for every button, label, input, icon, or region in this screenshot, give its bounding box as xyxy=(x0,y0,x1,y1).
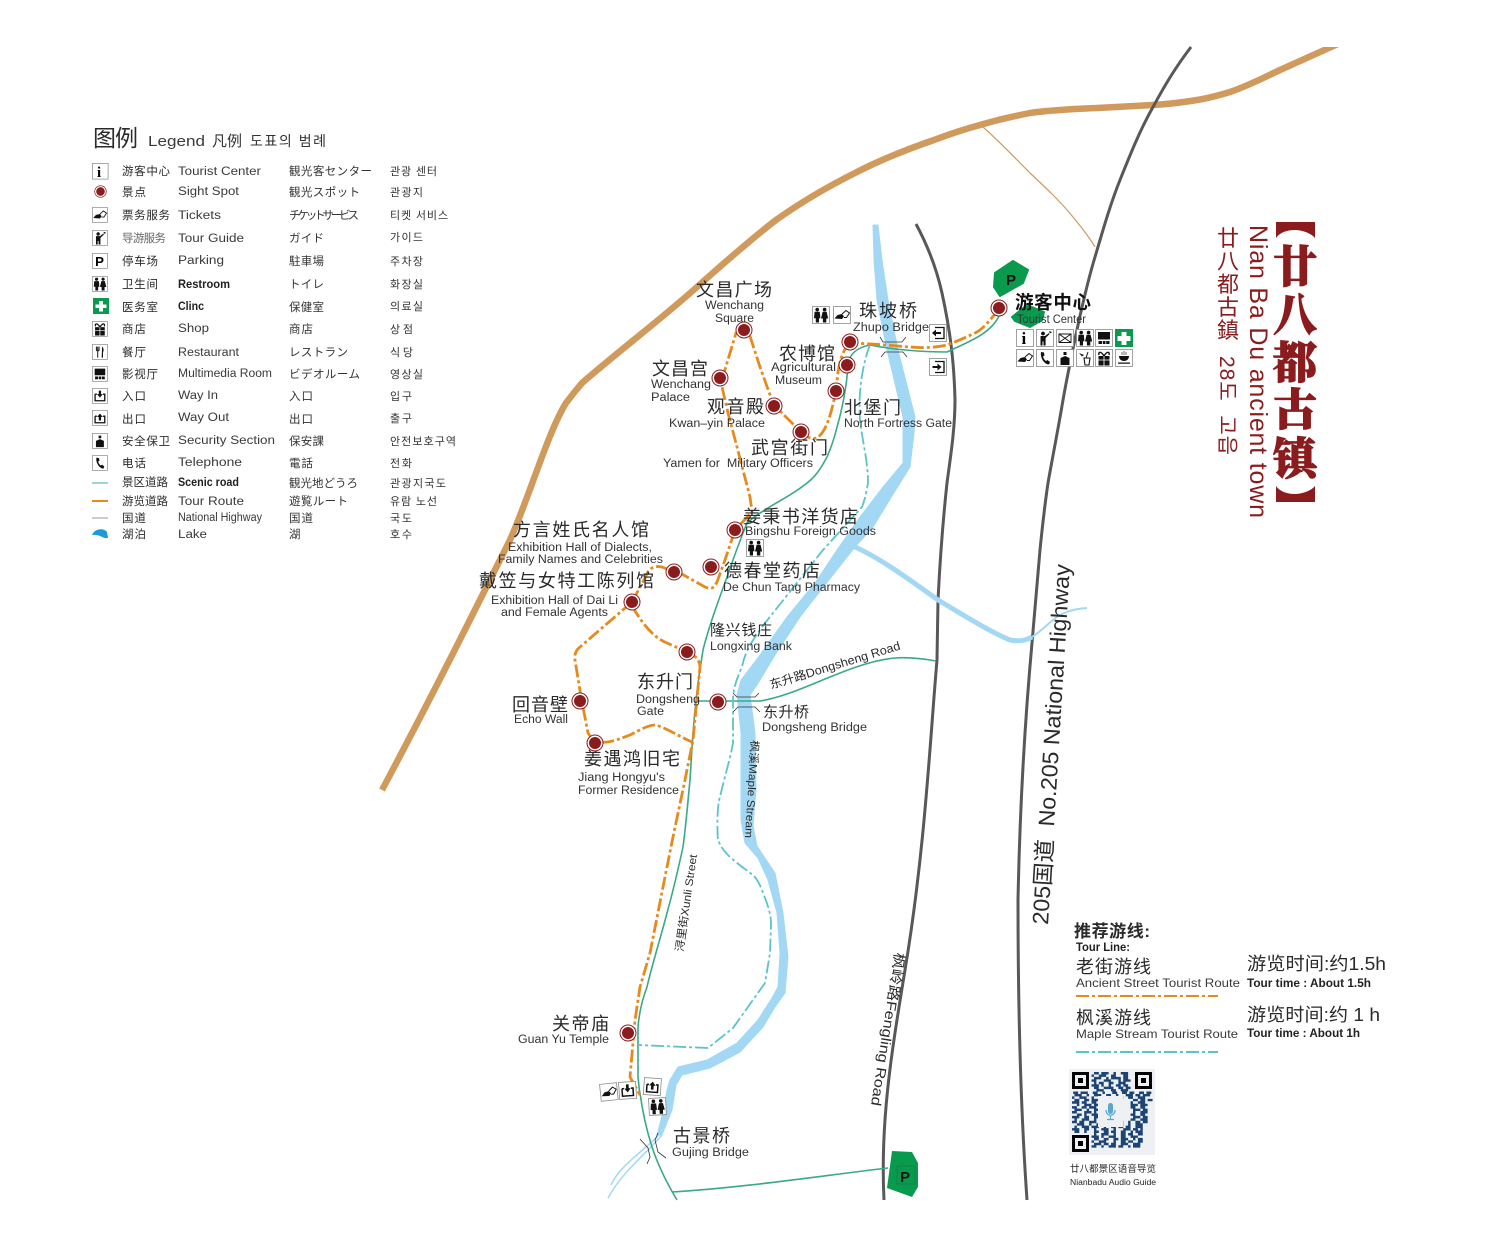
traditional title: 廿 xyxy=(1217,226,1239,251)
label: dongsheng bridge: Dongsheng Bridge xyxy=(762,722,867,734)
english title: Nian Ba Du ancient town xyxy=(1244,225,1272,518)
legend row: security section: Security Section xyxy=(178,435,275,447)
label: exhibition hall of dialects: 方言姓氏名人馆 xyxy=(513,520,649,540)
legend row: tickets: 票务服务 xyxy=(122,208,170,222)
ancient street route: Ancient Street Tourist Route xyxy=(1076,976,1240,990)
korean title: 28도 고읍 xyxy=(1215,356,1238,455)
tour time 1.5h xyxy=(1247,954,1386,990)
label: longxing bank: Longxing Bank xyxy=(710,641,792,653)
label: wenchang square xyxy=(696,280,772,325)
label: de chun tang pharmacy: De Chun Tang Pharmacy xyxy=(723,582,860,594)
label: longxing bank xyxy=(710,621,792,653)
legend row: lake xyxy=(92,527,412,541)
legend row: shop: Shop xyxy=(178,323,209,335)
road label: dongsheng road: 东升路Dongsheng Road xyxy=(767,638,902,692)
legend row: security section: 安全保卫 xyxy=(122,434,170,448)
fengling link road xyxy=(672,1168,888,1192)
legend row: security section xyxy=(92,433,456,448)
label: wenchang palace xyxy=(651,359,711,404)
legend title xyxy=(93,125,326,151)
legend row: national highway: 국도 xyxy=(390,513,412,525)
legend row: multimedia room: 영상실 xyxy=(390,368,423,381)
legend row: scenic road: Scenic road xyxy=(178,477,239,489)
label: gujing bridge xyxy=(672,1126,749,1159)
legend row: parking: P xyxy=(95,254,104,269)
legend row: telephone: 电话 xyxy=(122,457,146,470)
legend row: restaurant: Restaurant xyxy=(178,347,240,359)
legend row: lake: Lake xyxy=(178,529,207,541)
legend row: national highway: 国道 xyxy=(122,511,146,525)
title characters: 廿 xyxy=(1273,231,1317,295)
tour line heading: Tour Line: xyxy=(1076,940,1130,954)
label: dongsheng gate: Gate xyxy=(637,706,664,718)
legend row: clinic: Clinc xyxy=(178,301,205,313)
parking: south: P xyxy=(900,1169,910,1186)
legend row: tour route: 游览道路 xyxy=(122,494,168,508)
tour time 1h xyxy=(1247,1005,1380,1040)
label: exhibition hall of dialects xyxy=(498,520,663,566)
legend row: restaurant: レストラン xyxy=(289,347,348,359)
label: zhupo bridge: 珠坡桥 xyxy=(859,301,917,321)
label: dai li exhibition hall: Exhibition Hall of Dai Li xyxy=(491,595,618,607)
label: jiang hongyu former residence: 姜遇鸿旧宅 xyxy=(584,749,680,769)
legend row: telephone: Telephone xyxy=(178,457,242,469)
label: agricultural museum xyxy=(771,344,836,387)
legend row: tourist center: 游客中心 xyxy=(122,164,170,178)
dongsheng road xyxy=(696,658,936,701)
ancient street route (orange dashed) xyxy=(575,309,999,1095)
road label: xunli street: 浔里街Xunli Street xyxy=(672,853,700,952)
legend row: tour guide: Tour Guide xyxy=(178,233,244,245)
label: dai li exhibition hall: and Female Agents xyxy=(501,607,608,619)
traditional title: 古 xyxy=(1217,295,1239,320)
label: wenchang palace: Palace xyxy=(651,392,690,404)
icon: exit xyxy=(930,324,946,342)
label: guan yu temple xyxy=(518,1014,609,1046)
legend row: sight spot xyxy=(95,185,423,199)
label: echo wall xyxy=(512,695,568,726)
facility icons: tourist center: i xyxy=(1022,329,1026,348)
legend row: tour guide xyxy=(92,230,423,245)
title: Nianbadu ancient town xyxy=(1215,222,1324,518)
legend row: tourist center xyxy=(92,163,437,181)
legend row: tour guide: 가이드 xyxy=(390,231,423,244)
label: dongsheng gate xyxy=(636,672,700,718)
legend row: parking xyxy=(92,253,423,269)
tour time 1h: 游览时间:约 1 h xyxy=(1247,1005,1380,1025)
river tail xyxy=(608,1134,662,1198)
label: dai li exhibition hall: 戴笠与女特工陈列馆 xyxy=(479,571,654,591)
legend row: way out: 出口 xyxy=(122,412,146,426)
road label: maple stream: 枫溪Maple Stream xyxy=(742,740,762,838)
traditional title xyxy=(1217,226,1239,343)
legend row: national highway: National Highway xyxy=(178,512,262,524)
legend row: way out: 出口 xyxy=(289,412,313,426)
scenic road (green) xyxy=(638,316,999,1200)
legend row: sight spot: 景点 xyxy=(122,186,146,199)
qr microphone icon xyxy=(1098,1096,1123,1127)
legend row: restaurant xyxy=(92,344,413,359)
qr finder patterns xyxy=(1074,1074,1150,1150)
title brackets xyxy=(1276,222,1315,502)
legend row: clinic: 保健室 xyxy=(289,300,324,314)
legend row: restroom: 화장실 xyxy=(390,278,423,291)
legend row: shop: 商店 xyxy=(289,322,313,336)
label: kwan-yin palace xyxy=(669,397,765,430)
legend row: restroom: 卫生间 xyxy=(122,277,158,291)
bridge marks xyxy=(640,337,907,1164)
legend row: scenic road: 観光地どうろ xyxy=(289,476,358,490)
legend row: tour route: Tour Route xyxy=(178,496,244,508)
legend row: tickets: チケットサービス xyxy=(289,209,359,222)
legend row: way out: 출구 xyxy=(390,412,412,425)
label: exhibition hall of dialects: Family Names and Celebrities xyxy=(498,554,663,566)
parking: south xyxy=(887,1151,918,1197)
icon: restroom at bingshu xyxy=(746,540,764,556)
legend row: way in: 入口 xyxy=(289,390,313,403)
legend row: shop xyxy=(92,321,413,336)
label: gujing bridge: Gujing Bridge xyxy=(672,1147,749,1159)
legend table xyxy=(92,163,456,541)
legend row: clinic: 医务室 xyxy=(122,300,158,314)
legend row: scenic road xyxy=(92,475,446,490)
label: wenchang palace: 文昌宫 xyxy=(652,359,708,379)
icons: zhupo bridge restroom and tickets xyxy=(812,306,850,324)
legend row: multimedia room: Multimedia Room xyxy=(178,368,272,380)
tour time 1.5h: Tour time : About 1.5h xyxy=(1247,976,1371,990)
legend row: shop: 商店 xyxy=(122,322,146,336)
spot labels xyxy=(479,280,952,1159)
label: bingshu foreign goods: 姜秉书洋货店 xyxy=(743,507,858,527)
label: yamen for military officers: 武宫街门 xyxy=(751,438,828,458)
legend row: way in: 入口 xyxy=(122,390,146,403)
label: jiang hongyu former residence: Former Residence xyxy=(578,785,679,797)
label: north fortress gate: North Fortress Gate xyxy=(844,418,952,430)
road label: national highway 205: 205国道 No.205 National Highway xyxy=(1028,563,1075,925)
label: echo wall: 回音壁 xyxy=(512,695,568,715)
legend row: scenic road: 관광지국도 xyxy=(390,477,446,490)
label: zhupo bridge: Zhupo Bridge xyxy=(853,322,929,334)
legend row: restroom: トイレ xyxy=(289,279,324,291)
label: longxing bank: 隆兴钱庄 xyxy=(710,621,772,639)
provincial road (tan) xyxy=(382,43,1340,790)
legend row: tour route xyxy=(92,494,437,508)
legend row: tour route: 遊覧ルート xyxy=(289,494,348,508)
legend row: multimedia room: ビデオルーム xyxy=(289,367,360,381)
label: tourist center xyxy=(1015,292,1091,326)
legend row: tourist center: Tourist Center xyxy=(178,166,261,178)
legend row: way in xyxy=(92,388,412,403)
legend row: way in: Way In xyxy=(178,390,218,402)
road labels xyxy=(672,563,1075,1107)
title characters: 都 xyxy=(1273,327,1317,391)
parking: north: P xyxy=(1006,272,1016,289)
label: dongsheng gate: 东升门 xyxy=(637,672,693,692)
legend row: tour guide: ガイド xyxy=(289,232,324,245)
legend row: restaurant: 식당 xyxy=(390,346,413,359)
qr caption: 廿八都景区语音导览 xyxy=(1070,1163,1156,1175)
legend row: tourist center: i xyxy=(97,165,101,181)
label: jiang hongyu former residence: Jiang Hongyu's xyxy=(578,772,665,784)
legend row: sight spot: 観光スポット xyxy=(289,185,360,199)
legend row: restroom xyxy=(92,276,423,291)
title characters: 古 xyxy=(1273,374,1317,438)
label: yamen for military officers: Yamen for Military Officers xyxy=(663,458,813,470)
ancient street route: 老街游线 xyxy=(1076,957,1151,977)
legend row: parking: 停车场 xyxy=(122,254,158,268)
legend row: restroom: Restroom xyxy=(178,279,230,291)
traditional title: 都 xyxy=(1217,272,1239,297)
legend row: way out: Way Out xyxy=(178,412,230,424)
maple stream route xyxy=(1076,1008,1238,1052)
label: dai li exhibition hall xyxy=(479,571,654,619)
tour time 1h: Tour time : About 1h xyxy=(1247,1026,1360,1040)
legend row: tourist center: 観光客センター xyxy=(289,164,372,178)
legend row: telephone: 電話 xyxy=(289,456,314,470)
legend row: multimedia room xyxy=(92,366,423,381)
legend title: Legend xyxy=(148,133,205,150)
label: bingshu foreign goods: Bingshu Foreign Goods xyxy=(745,526,876,538)
legend row: tour guide: 导游服务 xyxy=(122,231,166,245)
legend row: multimedia room: 影视厅 xyxy=(122,367,158,381)
label: guan yu temple: 关帝庙 xyxy=(552,1014,609,1034)
label: kwan-yin palace: Kwan–yin Palace xyxy=(669,418,765,430)
legend row: shop: 상점 xyxy=(390,323,413,336)
label: wenchang square: 文昌广场 xyxy=(696,280,772,300)
title characters xyxy=(1273,231,1324,487)
label: north fortress gate xyxy=(844,398,952,430)
legend row: telephone: 전화 xyxy=(390,457,412,470)
side stream end xyxy=(1032,608,1087,637)
legend row: tour route: 유람 노선 xyxy=(390,495,437,508)
legend title: 图例 xyxy=(93,125,138,151)
label: yamen for military officers xyxy=(663,438,828,470)
fengling road xyxy=(883,224,955,1200)
label: de chun tang pharmacy xyxy=(723,561,860,594)
legend row: parking: Parking xyxy=(178,255,224,267)
legend row: telephone xyxy=(92,455,412,470)
road label: fengling road: 枫岭路Fengling Road xyxy=(868,952,908,1107)
tour time 1.5h: 游览时间:约1.5h xyxy=(1247,954,1386,974)
traditional title: 八 xyxy=(1217,249,1239,274)
label: dongsheng bridge: 东升桥 xyxy=(763,704,809,721)
label: guan yu temple: Guan Yu Temple xyxy=(518,1034,609,1046)
maple stream route: Maple Stream Tourist Route xyxy=(1076,1027,1238,1041)
legend title: 도표의 범례 xyxy=(250,133,326,149)
label: kwan-yin palace: 观音殿 xyxy=(707,397,764,417)
label: tourist center: 游客中心 xyxy=(1015,292,1091,313)
label: echo wall: Echo Wall xyxy=(514,714,568,726)
legend row: tourist center: 관광 센터 xyxy=(390,165,437,178)
label: tourist center: Tourist Center xyxy=(1017,314,1086,326)
legend row: scenic road: 景区道路 xyxy=(122,475,168,489)
legend row: way out xyxy=(92,410,412,426)
legend row: security section: 保安課 xyxy=(289,434,324,448)
legend row: sight spot: 관광지 xyxy=(390,186,423,199)
label: de chun tang pharmacy: 德春堂药店 xyxy=(724,561,820,581)
green area near tourist center xyxy=(1012,305,1044,327)
label: bingshu foreign goods xyxy=(743,507,876,538)
title characters: 镇 xyxy=(1273,423,1324,487)
icons: south gate services xyxy=(600,1078,666,1115)
legend row: lake: 湖泊 xyxy=(122,527,146,541)
river: maple stream xyxy=(657,225,915,1135)
qr caption xyxy=(1070,1163,1157,1187)
maple stream route: 枫溪游线 xyxy=(1076,1008,1151,1028)
label: wenchang square: Wenchang xyxy=(705,300,764,312)
legend title: 凡例 xyxy=(212,133,242,150)
icon: entrance xyxy=(930,358,946,376)
ancient street route xyxy=(1076,957,1240,996)
label: dongsheng gate: Dongsheng xyxy=(636,694,700,706)
tour line heading xyxy=(1074,921,1150,954)
legend row: way in: 입구 xyxy=(390,390,412,403)
label: agricultural museum: 农博馆 xyxy=(779,344,835,364)
legend row: clinic xyxy=(93,298,423,314)
legend row: restaurant: 餐厅 xyxy=(122,345,146,359)
legend row: parking: 駐車場 xyxy=(289,254,324,268)
tour line heading: 推荐游线: xyxy=(1074,921,1150,941)
label: agricultural museum: Museum xyxy=(775,375,822,387)
legend row: national highway xyxy=(92,511,412,525)
legend row: clinic: 의료실 xyxy=(390,300,423,313)
label: zhupo bridge xyxy=(853,301,929,334)
label: jiang hongyu former residence xyxy=(578,749,680,797)
legend row: tickets: 티켓 서비스 xyxy=(390,209,448,222)
legend row: sight spot: Sight Spot xyxy=(178,186,240,198)
label: exhibition hall of dialects: Exhibition Hall of Dialects, xyxy=(508,542,652,554)
qr code: audio guide xyxy=(1069,1069,1155,1155)
side stream xyxy=(855,547,1032,641)
label: gujing bridge: 古景桥 xyxy=(673,1126,730,1146)
legend row: national highway: 国道 xyxy=(289,511,314,525)
national highway 205 xyxy=(1018,47,1191,1200)
label: north fortress gate: 北堡门 xyxy=(844,398,901,418)
facility icons: tourist center xyxy=(1016,329,1133,366)
sight spots xyxy=(572,300,1007,1041)
legend row: tickets xyxy=(92,207,448,222)
title characters: 八 xyxy=(1273,279,1317,343)
label: agricultural museum: Agricultural xyxy=(771,362,836,374)
legend row: security section: 안전보호구역 xyxy=(390,435,456,448)
legend row: tickets: Tickets xyxy=(178,210,221,222)
tour line panel xyxy=(1074,921,1386,1052)
label: wenchang square: Square xyxy=(715,313,754,325)
traditional title: 鎮 xyxy=(1217,318,1239,343)
label: dongsheng bridge xyxy=(762,704,867,734)
map: roads, river and routes xyxy=(382,43,1340,1200)
legend row: lake: 호수 xyxy=(390,528,412,541)
qr caption: Nianbadu Audio Guide xyxy=(1070,1178,1157,1187)
label: wenchang palace: Wenchang xyxy=(651,379,711,391)
legend row: lake: 湖 xyxy=(289,527,300,541)
maple stream route (teal dashed) xyxy=(638,345,870,1048)
branch road (tan) xyxy=(983,127,1095,247)
legend row: parking: 주차장 xyxy=(390,255,423,268)
parking: north xyxy=(994,261,1028,296)
